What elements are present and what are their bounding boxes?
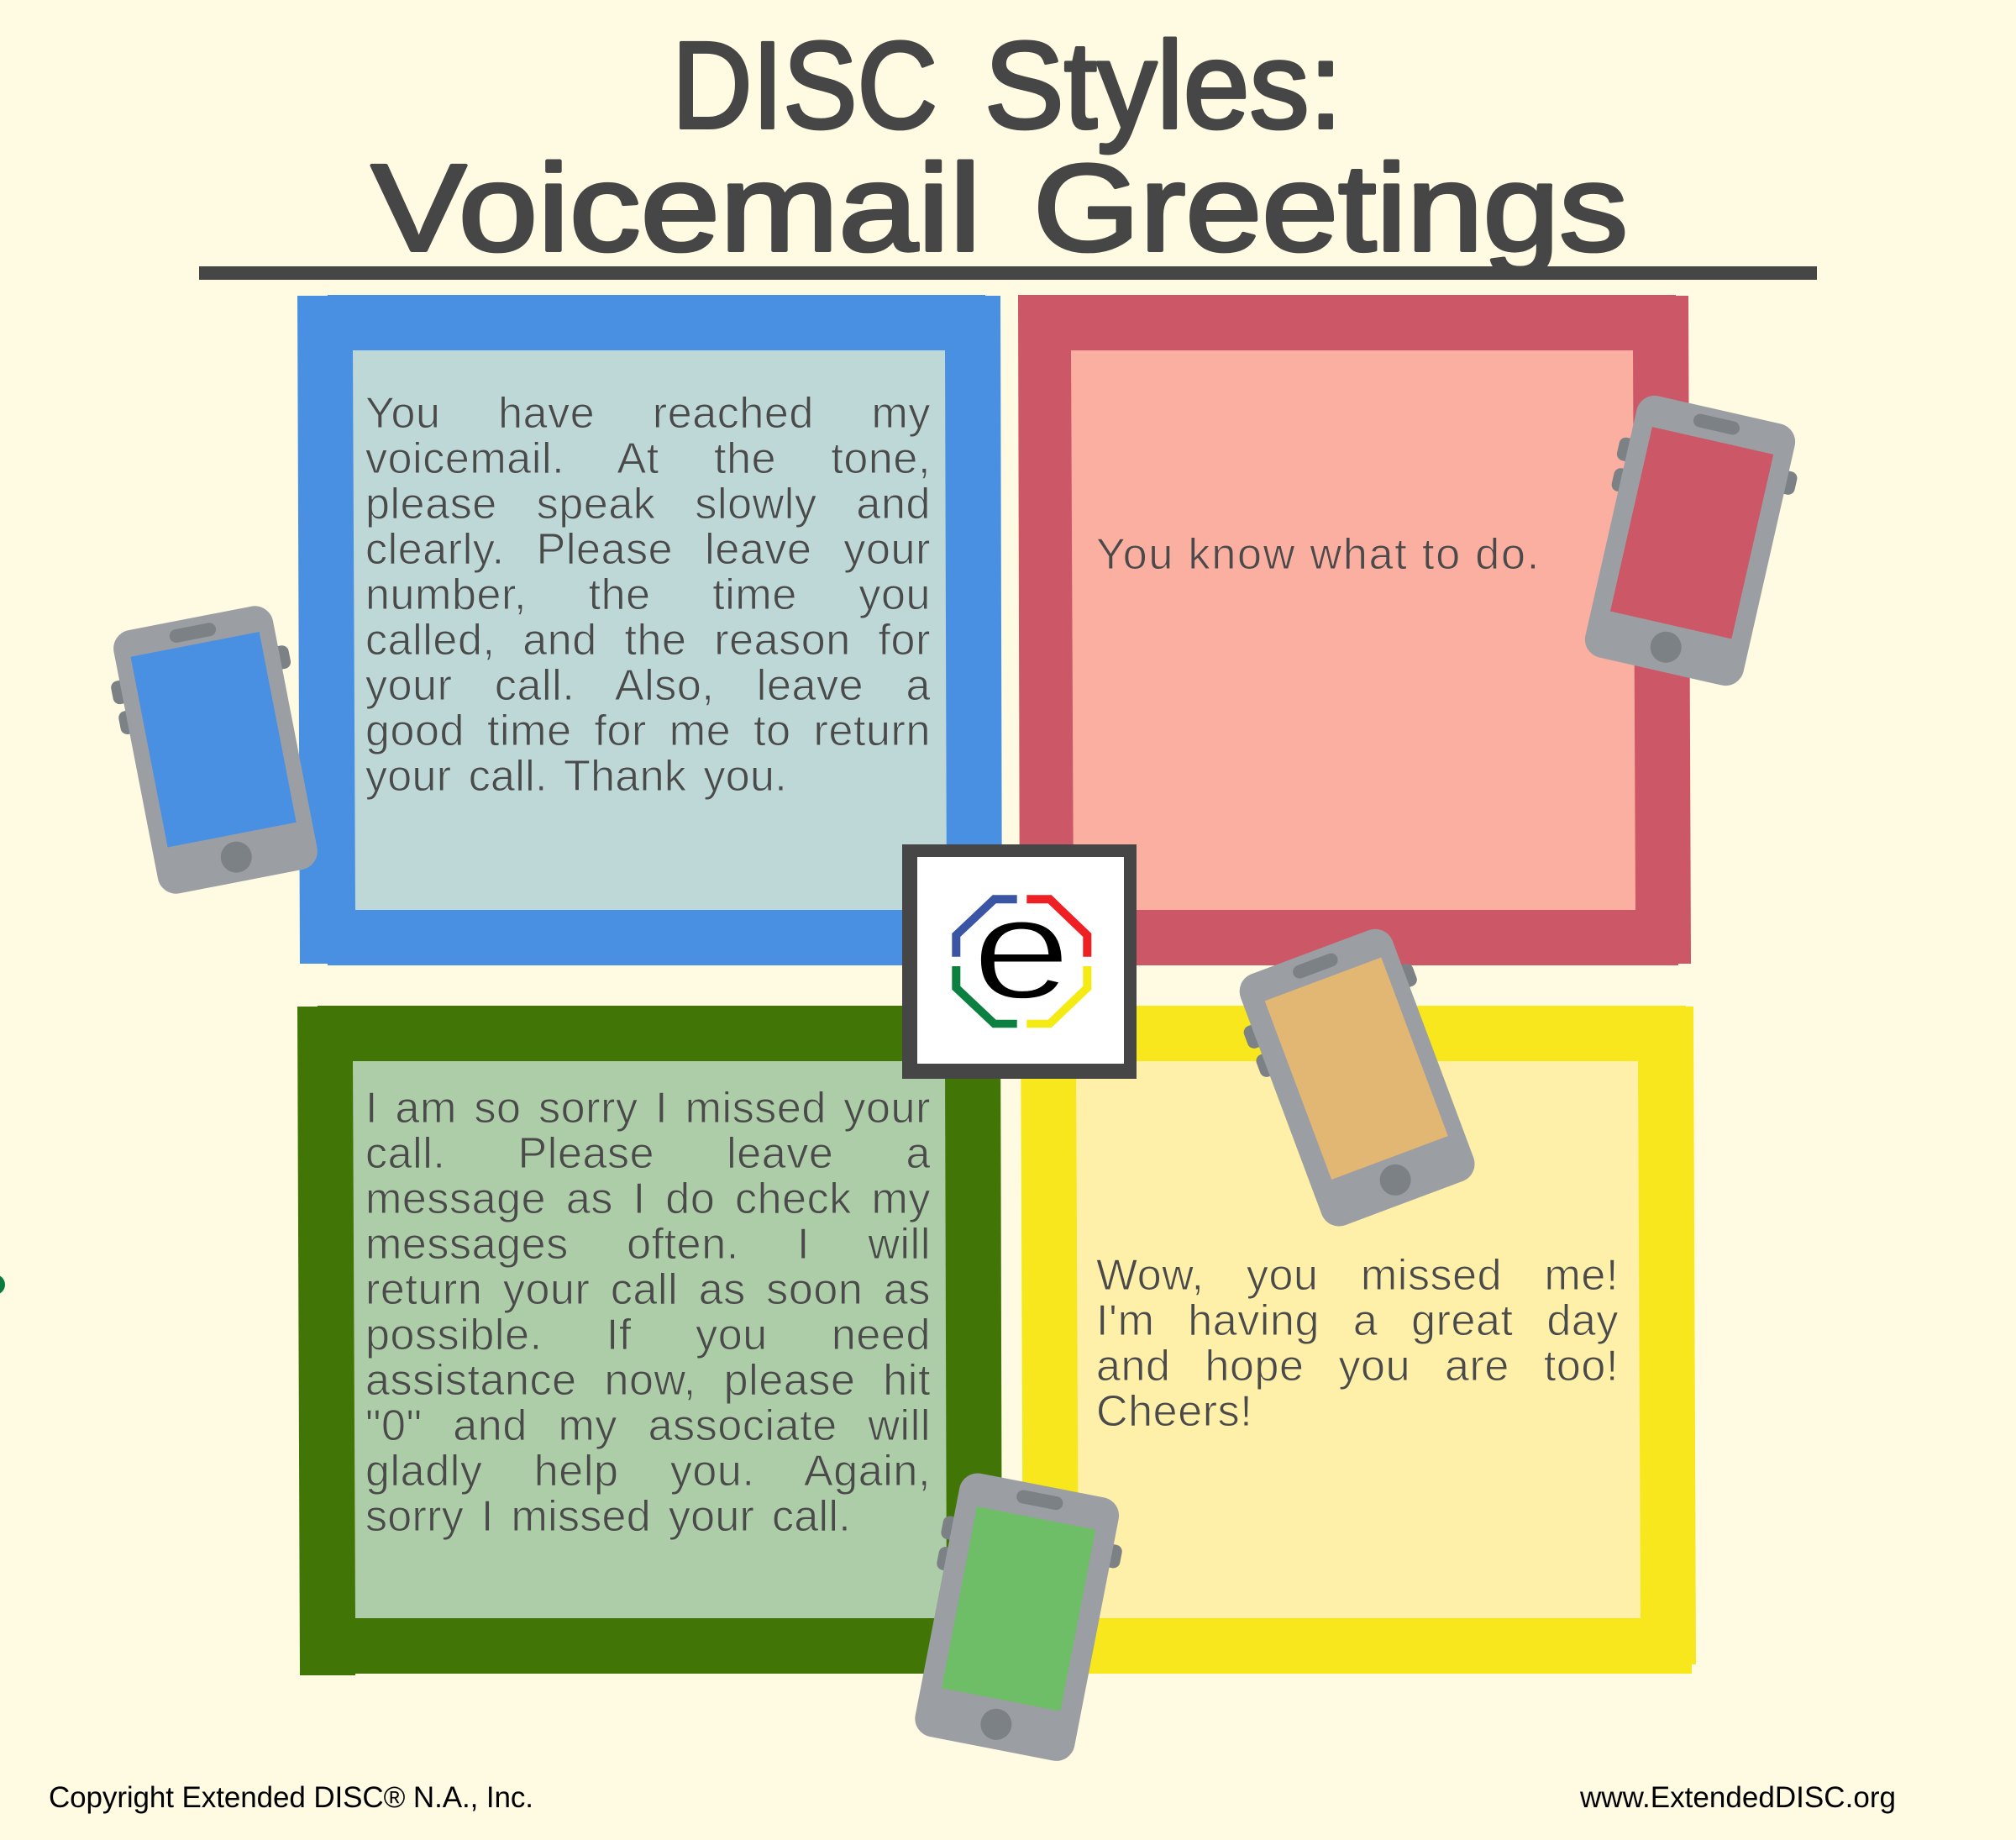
text block: blue panel greeting: your call. Also, leave a xyxy=(365,661,931,710)
text block: green panel greeting: possible. If you need xyxy=(365,1311,931,1359)
footer copyright: Copyright Extended DISC® N.A., Inc. xyxy=(49,1781,533,1814)
text block: blue panel greeting: good time for me to return xyxy=(365,707,931,755)
decorative green dot at left edge xyxy=(0,1275,5,1295)
text block: yellow panel greeting xyxy=(1096,1251,1619,1436)
icon: phone orange xyxy=(1226,920,1489,1235)
text block: green panel greeting: assistance now, please hit xyxy=(365,1356,931,1405)
panel: green (C style) xyxy=(297,1006,1002,1675)
title underline rule xyxy=(199,266,1817,280)
icon: phone blue xyxy=(101,601,330,899)
icon: phone green xyxy=(902,1469,1131,1766)
text block: blue panel greeting xyxy=(365,389,931,801)
text block: green panel greeting: return your call as soon as xyxy=(365,1265,931,1314)
text block: yellow panel greeting: Cheers! xyxy=(1096,1387,1252,1436)
title xyxy=(371,17,1628,277)
text block: blue panel greeting: your call. Thank you. xyxy=(365,752,787,801)
title: Voicemail xyxy=(371,139,981,277)
center logo box: e xyxy=(972,869,1071,1028)
icon: phone red xyxy=(1572,390,1809,691)
text block: yellow panel greeting: and hope you are too! xyxy=(1096,1342,1619,1391)
text block: blue panel greeting: You have reached my xyxy=(365,389,931,438)
panel: yellow (I style) xyxy=(1021,1006,1696,1674)
footer website: www.ExtendedDISC.org xyxy=(1579,1781,1896,1814)
text block: green panel greeting: call. Please leave a xyxy=(365,1129,931,1178)
text block: blue panel greeting: clearly. Please leave your xyxy=(365,525,931,574)
text block: green panel greeting: messages often. I will xyxy=(365,1220,931,1269)
text block: yellow panel greeting: I'm having a great day xyxy=(1096,1296,1619,1345)
panel: blue (S style) xyxy=(297,295,1002,965)
center logo box xyxy=(902,844,1137,1079)
text block: blue panel greeting: number, the time you xyxy=(365,570,931,619)
text block: green panel greeting xyxy=(365,1084,931,1541)
text block: green panel greeting: I am so sorry I missed your xyxy=(365,1084,931,1133)
text block: blue panel greeting: please speak slowly and xyxy=(365,480,931,528)
title: Styles: xyxy=(984,17,1342,155)
text block: red panel greeting: You know what to do. xyxy=(1096,530,1541,579)
text block: blue panel greeting: voicemail. At the tone, xyxy=(365,434,931,483)
text block: green panel greeting: message as I do check my xyxy=(365,1175,931,1223)
text block: yellow panel greeting: Wow, you missed me! xyxy=(1096,1251,1619,1300)
text block: green panel greeting: "0" and my associate will xyxy=(365,1401,931,1450)
text block: blue panel greeting: called, and the reason for xyxy=(365,616,931,665)
text block: green panel greeting: sorry I missed your call. xyxy=(365,1492,851,1541)
panel: red (D style) xyxy=(1018,295,1691,965)
title: Greetings xyxy=(1033,139,1628,277)
title: DISC xyxy=(672,17,937,155)
text block: green panel greeting: gladly help you. Again, xyxy=(365,1447,931,1496)
